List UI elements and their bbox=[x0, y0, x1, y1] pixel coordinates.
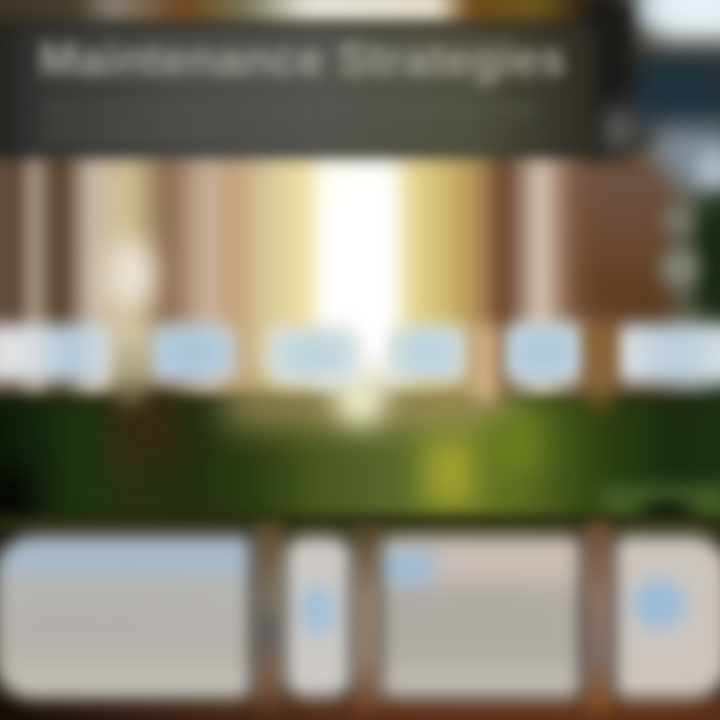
row of pill cards bbox=[0, 310, 720, 398]
right grey-blue sky bbox=[650, 125, 720, 187]
pill 5 bbox=[502, 322, 586, 384]
bokeh spot bbox=[662, 205, 692, 235]
subtitle: Keep your forest healthy with regular care and monitoring through every season of the year bbox=[45, 100, 539, 139]
pill 6 bbox=[616, 324, 720, 384]
light patch left bbox=[108, 240, 154, 310]
card 2 icon bbox=[299, 584, 337, 636]
top canopy strip bbox=[0, 0, 720, 24]
card 1 heading: Routine Inspection bbox=[26, 549, 188, 569]
brown trunk mass right bbox=[578, 165, 670, 315]
green ground bbox=[0, 396, 720, 527]
dark foliage lower right bbox=[695, 205, 720, 315]
bottom cards bbox=[0, 515, 720, 716]
card 1 text: Check trees for signs of disease and damage, record findings and plan the next steps. bbox=[28, 586, 218, 635]
pill 4 bbox=[388, 324, 470, 382]
upper right sky bbox=[645, 0, 720, 45]
pill 1 bbox=[0, 324, 114, 382]
dark corner left bbox=[0, 470, 30, 540]
trunk over pills bbox=[586, 325, 612, 410]
warm glow on ground bbox=[225, 385, 510, 425]
card 3 bbox=[380, 535, 582, 699]
bottom brown band bbox=[0, 696, 720, 720]
trunk bottom 2 bbox=[352, 522, 382, 712]
pill 3 bbox=[266, 326, 360, 384]
right light spot bbox=[695, 150, 720, 190]
card 2 bbox=[284, 536, 352, 698]
trunk bottom 3 bbox=[584, 522, 612, 712]
grey bokeh spot bbox=[600, 108, 638, 152]
card 1 bbox=[0, 535, 252, 699]
dark trunk base left bbox=[115, 390, 175, 460]
dark band above cards bbox=[0, 516, 720, 532]
trunk bottom 1 bbox=[254, 522, 284, 712]
trunk over pills bbox=[472, 325, 496, 400]
yellow-green highlight bbox=[425, 440, 475, 505]
pill 2 bbox=[146, 324, 236, 382]
card 3 heading bbox=[384, 549, 434, 585]
sun glare on ground bbox=[335, 375, 385, 425]
title: Maintenance Strategies bbox=[39, 33, 566, 85]
right side foliage bbox=[625, 58, 720, 128]
plant lower right bbox=[600, 485, 720, 525]
card 3 heading: Care bbox=[384, 549, 414, 565]
trunk over pills bbox=[116, 325, 146, 410]
sunbeam bbox=[332, 180, 388, 420]
card 4 bbox=[614, 535, 720, 699]
header panel bbox=[0, 26, 596, 158]
yellow-green highlight bbox=[490, 420, 540, 470]
dark trunk upper right bbox=[586, 0, 630, 165]
bokeh spot bbox=[660, 248, 698, 288]
card 3 text: Prune, thin and replant where needed to keep the stand strong and productive. bbox=[394, 588, 558, 637]
card 4 icon bbox=[632, 579, 686, 629]
plant dark hole bbox=[640, 500, 694, 526]
tree trunks and sunlight strip bbox=[0, 150, 720, 400]
